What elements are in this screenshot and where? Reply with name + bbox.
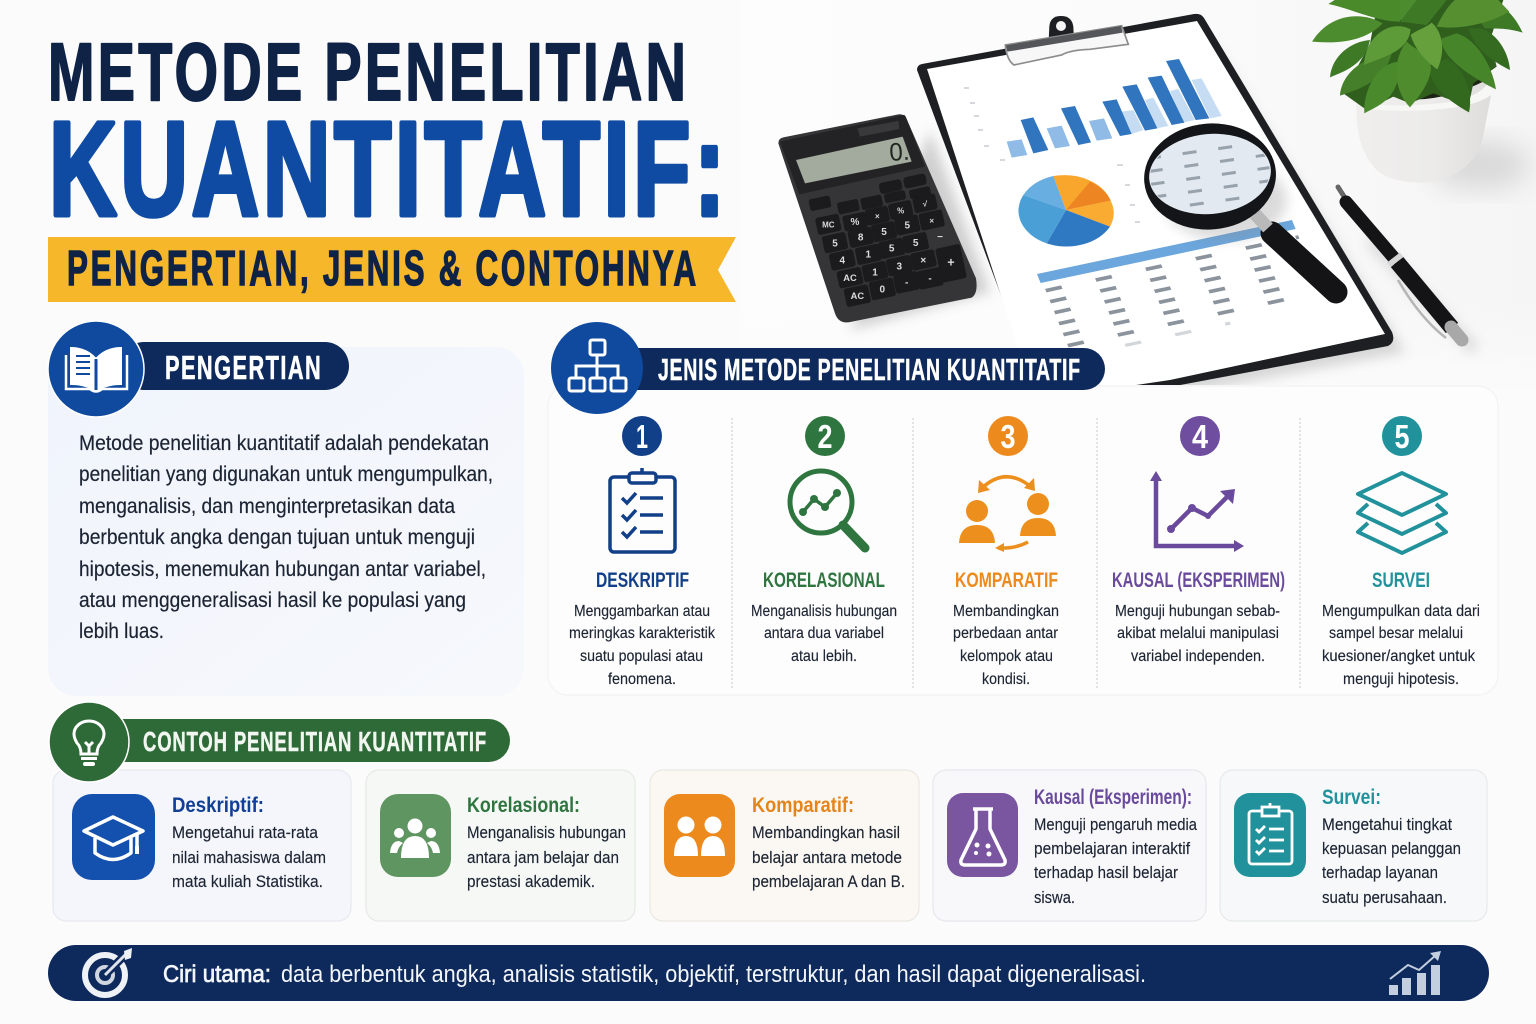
pengertian paragraph: atau menggeneralisasi hasil ke populasi yang (79, 589, 466, 612)
jenis 4: kausal: Menguji hubungan sebab- (1115, 603, 1280, 620)
bar chart (1007, 59, 1222, 158)
contoh card 3: komparatif: belajar antara metode (752, 848, 902, 867)
contoh card 1: deskriptif: Deskriptif: (172, 794, 264, 817)
jenis 2: korelasional: antara dua variabel (764, 625, 884, 642)
jenis 4: kausal: KAUSAL (EKSPERIMEN) (1112, 569, 1285, 592)
jenis 5: survei: menguji hipotesis. (1343, 671, 1459, 688)
photo: calculator: 8 (858, 233, 864, 244)
jenis 3: komparatif: Membandingkan (953, 603, 1059, 620)
icon: magnifier with trend (790, 471, 865, 548)
icon: trending line chart (1150, 471, 1244, 552)
photo: magnifying glass (1140, 118, 1336, 292)
jenis 5: survei: SURVEI (1372, 569, 1430, 592)
pengertian heading pill (120, 342, 349, 390)
photo: calculator: 4 (840, 256, 846, 267)
pengertian paragraph: penelitian yang digunakan untuk mengumpulkan, (79, 463, 493, 486)
icon: hierarchy (551, 322, 643, 414)
contoh card 5: survei: terhadap layanan (1322, 863, 1438, 882)
jenis 2: korelasional: 2 (818, 418, 832, 455)
chart axis ticks (964, 88, 1140, 222)
photo: calculator: - (928, 274, 932, 285)
jenis 4: kausal: variabel independen. (1131, 648, 1265, 665)
icon: two people exchange (959, 477, 1056, 552)
jenis 5: survei: kuesioner/angket untuk (1322, 648, 1476, 665)
contoh card 4: kausal: terhadap hasil belajar (1034, 863, 1178, 882)
jenis 1: deskriptif: suatu populasi atau (580, 648, 703, 665)
icon: target with arrow (85, 948, 132, 995)
photo: calculator: √ (923, 200, 928, 209)
jenis 3: komparatif: kondisi. (982, 671, 1030, 688)
jenis 3: komparatif: KOMPARATIF (955, 569, 1058, 592)
bottom bar: ciri utama (48, 945, 1489, 1001)
contoh card 4: kausal: Menguji pengaruh media (1034, 815, 1197, 834)
photo: calculator: 3 (897, 261, 903, 272)
icon: open book (48, 321, 144, 417)
jenis 1: deskriptif: meringkas karakteristik (569, 625, 716, 642)
panel: jenis metode (548, 322, 1498, 695)
panel: pengertian (48, 321, 524, 696)
jenis 2: korelasional: atau lebih. (791, 648, 857, 665)
contoh card 3: komparatif: pembelajaran A dan B. (752, 872, 905, 891)
jenis 3: komparatif (953, 416, 1059, 688)
icon: two people (664, 794, 735, 877)
bottom bar: ciri utama: data berbentuk angka, analisis statistik, objektif, terstruktur, dan hasil dapat digeneralisasi. (281, 961, 1146, 988)
jenis 5: survei: 5 (1394, 418, 1410, 455)
photo: calculator: 0 (880, 284, 886, 295)
icon: graduation cap (72, 794, 155, 880)
column dividers (732, 418, 1300, 688)
contoh card 1: deskriptif: mata kuliah Statistika. (172, 872, 323, 891)
jenis 1: deskriptif: 1 (636, 418, 648, 455)
photo: calculator: 5 (913, 238, 919, 249)
pengertian paragraph (79, 432, 493, 643)
jenis heading pill (610, 348, 1105, 390)
pengertian heading pill: PENGERTIAN (165, 349, 321, 386)
jenis 1: deskriptif: DESKRIPTIF (596, 569, 689, 592)
photo: calculator: + (947, 256, 955, 270)
jenis 3: komparatif: perbedaan antar (953, 625, 1059, 642)
contoh heading pill (100, 719, 510, 762)
contoh card 5: survei: Survei: (1322, 786, 1381, 809)
contoh card 3: komparatif (650, 770, 919, 921)
jenis 1: deskriptif: Menggambarkan atau (574, 603, 710, 620)
pengertian paragraph: Metode penelitian kuantitatif adalah pendekatan (79, 432, 489, 455)
jenis 2: korelasional: KORELASIONAL (763, 569, 885, 592)
photo: calculator: 5 (832, 238, 838, 249)
photo: calculator: AC (851, 291, 864, 301)
pengertian paragraph: hipotesis, menemukan hubungan antar variabel, (79, 558, 486, 581)
pie chart (1018, 175, 1114, 246)
contoh heading pill: CONTOH PENELITIAN KUANTITATIF (143, 727, 486, 758)
jenis heading pill: JENIS METODE PENELITIAN KUANTITATIF (658, 354, 1080, 387)
pengertian paragraph: menganalisis, dan menginterpretasikan data (79, 495, 455, 518)
contoh card 2: korelasional: prestasi akademik. (467, 872, 595, 891)
contoh card 5: survei: Mengetahui tingkat (1322, 815, 1452, 834)
photo: clipboard with report (917, 14, 1405, 410)
contoh card 4: kausal (933, 770, 1206, 921)
data table (1037, 220, 1300, 348)
photo: calculator: × (929, 216, 934, 225)
contoh card 2: korelasional: antara jam belajar dan (467, 848, 619, 867)
contoh card 2: korelasional: Korelasional: (467, 794, 580, 817)
photo: calculator: × (920, 255, 926, 266)
jenis 4: kausal: 4 (1192, 418, 1209, 455)
contoh card 1: deskriptif: Mengetahui rata-rata (172, 823, 318, 842)
contoh card 5: survei: suatu perusahaan. (1322, 888, 1447, 907)
contoh card 2: korelasional: Menganalisis hubungan (467, 823, 626, 842)
jenis 2: korelasional (751, 416, 897, 665)
icon: stacked layers (1358, 473, 1446, 553)
contoh card 1: deskriptif: nilai mahasiswa dalam (172, 848, 326, 867)
clipboard clip (1005, 16, 1128, 65)
photo: calculator: 5 (905, 220, 911, 231)
title: kuantitatif: KUANTITATIF: (49, 93, 725, 244)
jenis 4: kausal: akibat melalui manipulasi (1117, 625, 1279, 642)
photo: calculator: × (875, 212, 880, 221)
jenis 5: survei (1322, 416, 1480, 688)
title: metode penelitian: METODE PENELITIAN (48, 26, 686, 118)
photo: pen (1338, 187, 1475, 350)
photo: calculator: 1 (872, 267, 878, 278)
photo: calculator: 0. (888, 138, 910, 167)
icon: group of people (380, 794, 451, 877)
photo: calculator: AC (843, 273, 857, 283)
photo: desk with calculator, clipboard, magnifier, pen and plant (778, 0, 1530, 410)
icon: growth bars (1389, 951, 1441, 995)
jenis 3: komparatif: kelompok atau (960, 648, 1053, 665)
photo: calculator: % (897, 206, 904, 215)
icon: flask (947, 793, 1018, 877)
contoh card 4: kausal: siswa. (1034, 888, 1075, 907)
jenis 5: survei: sampel besar melalui (1329, 625, 1463, 642)
photo: calculator: 5 (889, 244, 895, 255)
photo: calculator: − (937, 232, 943, 243)
pengertian paragraph: berbentuk angka dengan tujuan untuk menguji (79, 526, 475, 549)
contoh card 1: deskriptif (53, 770, 351, 921)
icon: survey clipboard (1234, 793, 1306, 877)
contoh card 4: kausal: Kausal (Eksperimen): (1034, 786, 1192, 809)
section: contoh penelitian (49, 702, 1487, 921)
bottom bar: ciri utama: Ciri utama: (163, 961, 271, 988)
photo: calculator: % (851, 217, 860, 228)
photo: calculator: MC (822, 221, 835, 230)
photo: calculator: - (905, 278, 908, 289)
subtitle banner: PENGERTIAN, JENIS & CONTOHNYA (67, 241, 696, 296)
contoh card 3: komparatif: Membandingkan hasil (752, 823, 900, 842)
jenis 2: korelasional: Menganalisis hubungan (751, 603, 897, 620)
jenis 4: kausal (1112, 416, 1285, 665)
pengertian paragraph: lebih luas. (79, 620, 164, 643)
photo: calculator: 5 (881, 227, 887, 238)
contoh card 2: korelasional (366, 770, 635, 921)
photo: calculator: 1 (866, 250, 872, 261)
icon: light bulb (49, 702, 129, 782)
contoh card 5: survei: kepuasan pelanggan (1322, 839, 1461, 858)
icon: checklist clipboard (610, 468, 675, 552)
contoh card 5: survei (1220, 770, 1487, 921)
jenis 1: deskriptif (569, 416, 716, 688)
jenis 1: deskriptif: fenomena. (608, 671, 676, 688)
jenis 5: survei: Mengumpulkan data dari (1322, 603, 1480, 620)
photo: calculator (778, 114, 990, 330)
jenis 3: komparatif: 3 (1000, 418, 1016, 455)
contoh card 4: kausal: pembelajaran interaktif (1034, 839, 1190, 858)
contoh card 3: komparatif: Komparatif: (752, 794, 854, 817)
photo: plant in white pot (1312, 0, 1530, 189)
